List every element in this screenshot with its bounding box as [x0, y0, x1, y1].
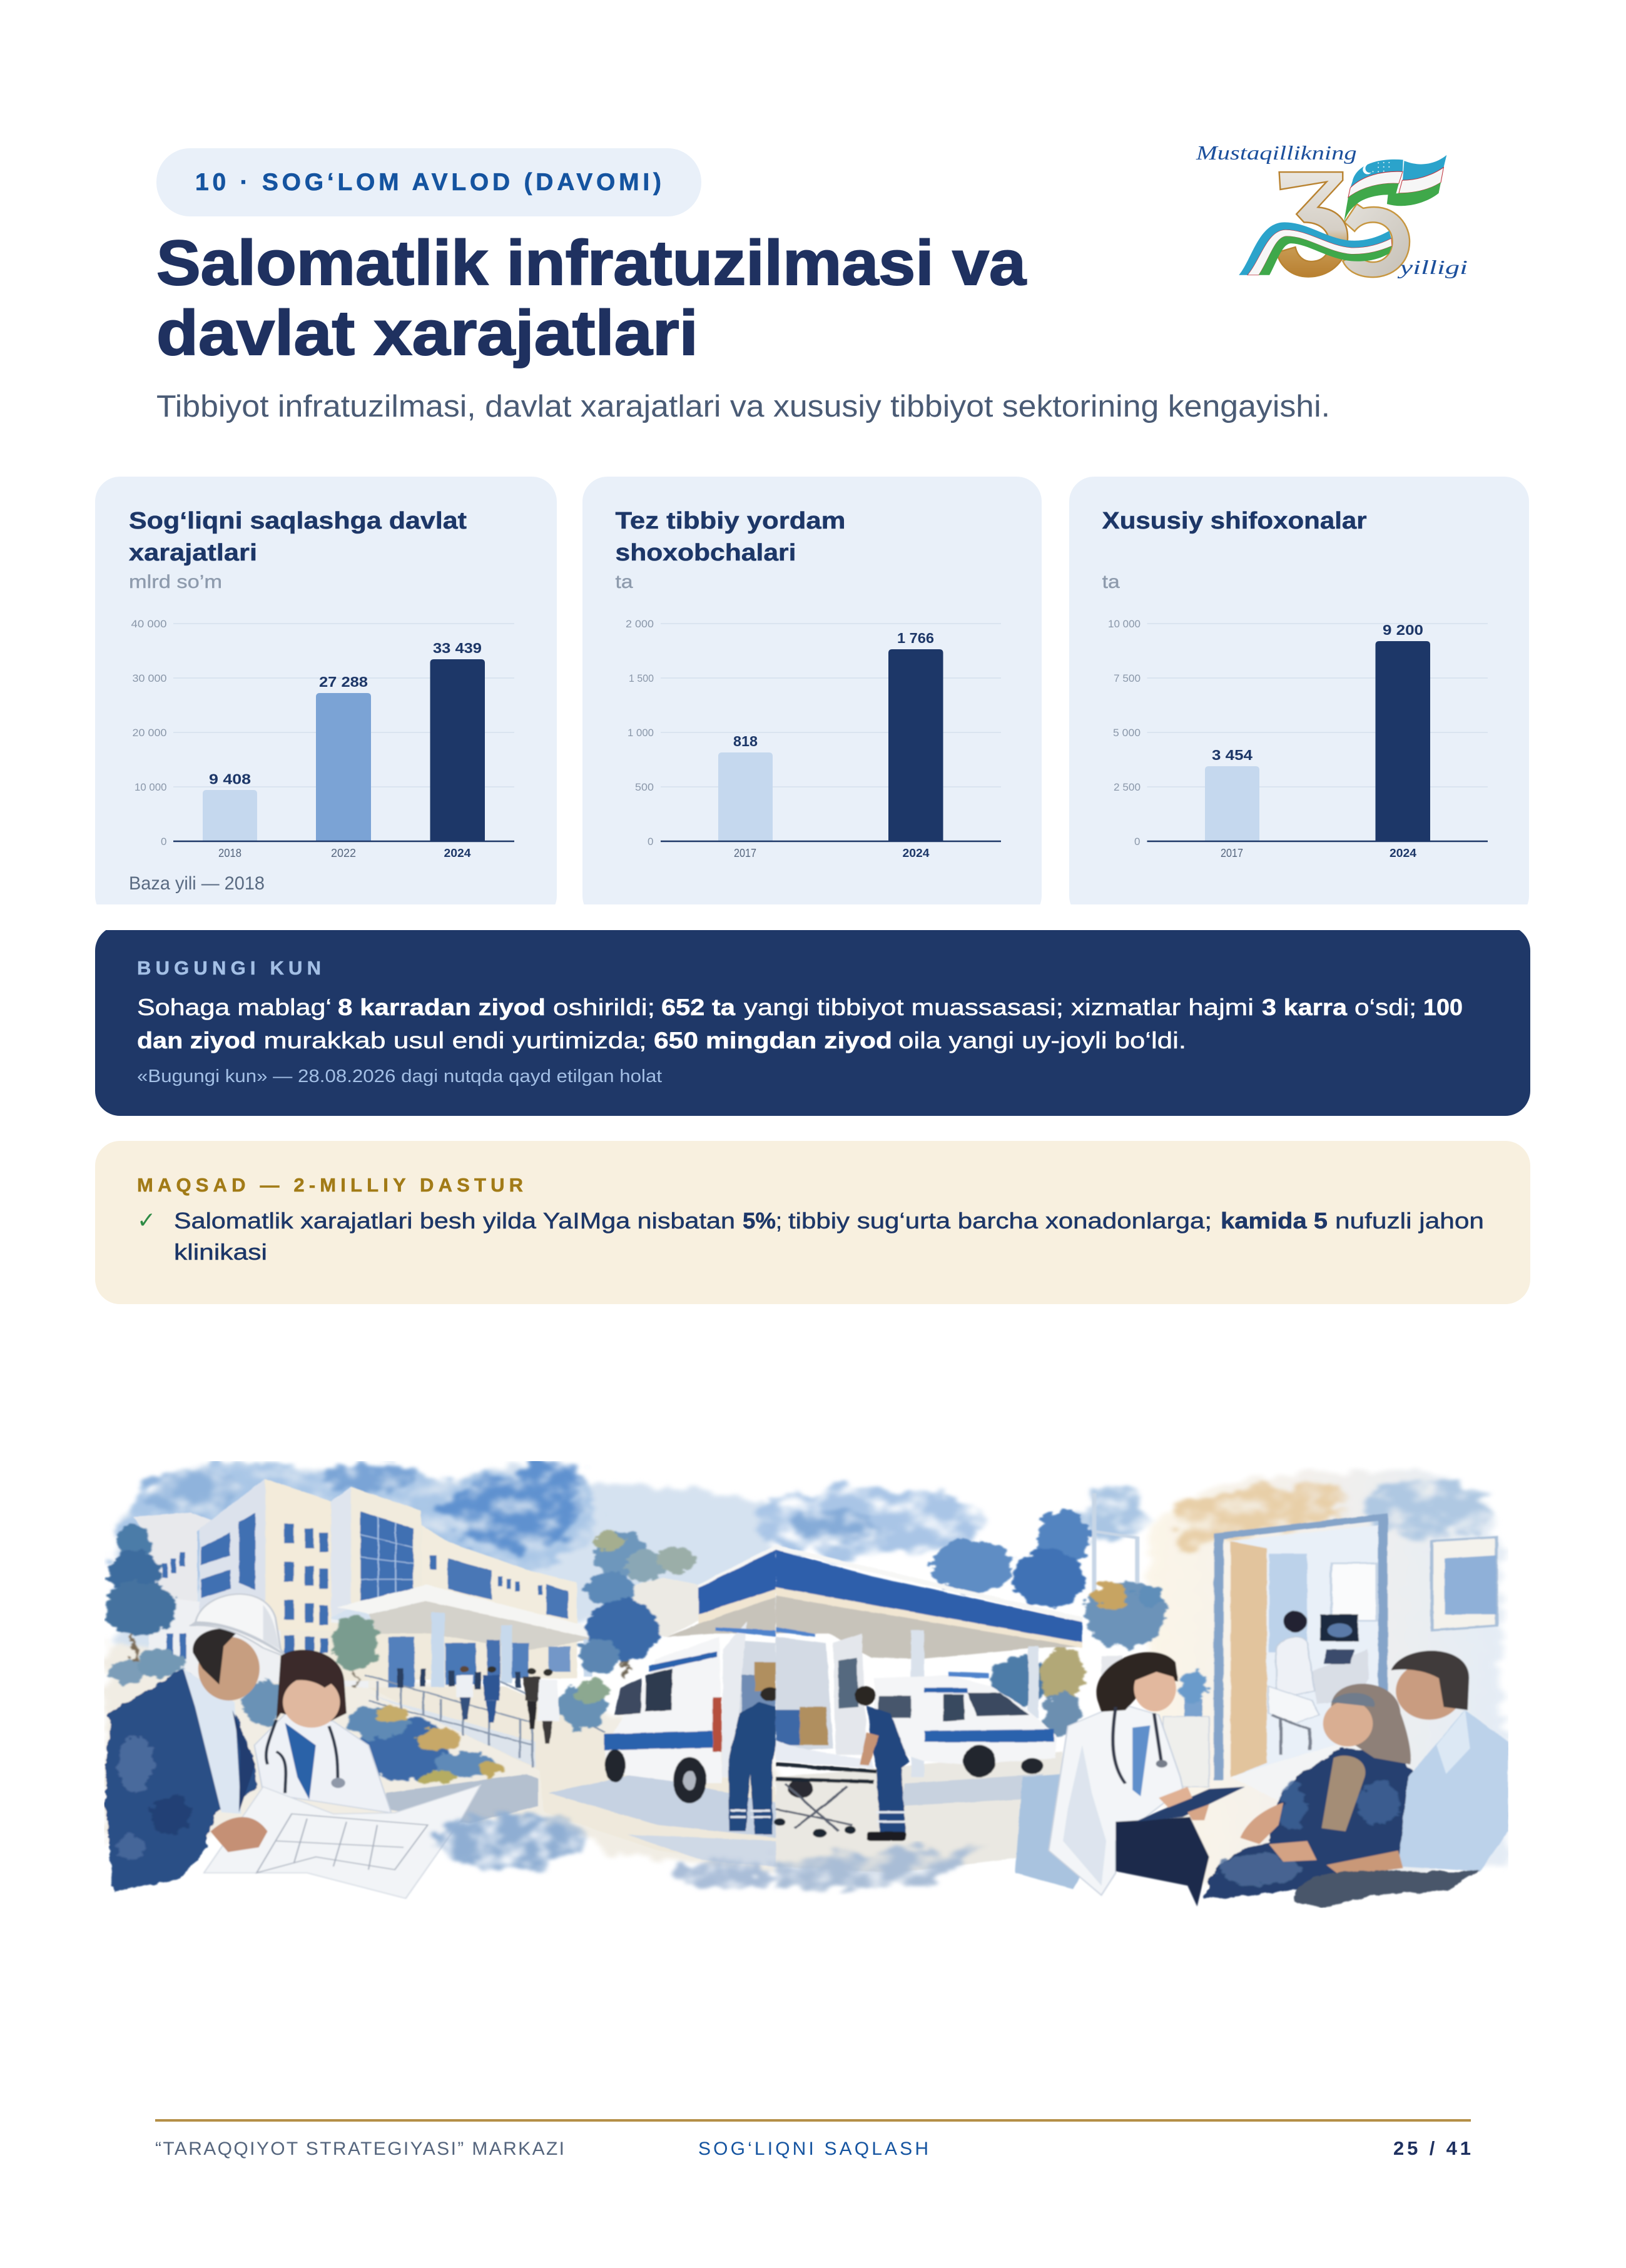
bar chart: 2017: [1221, 847, 1243, 859]
bar chart: 7 500: [1114, 672, 1141, 684]
man in blue shirt: [1293, 1651, 1508, 1908]
callout label: BUGUNGI KUN: [137, 957, 321, 979]
logo digit 5: [1343, 204, 1410, 277]
icon: check mark: ✓: [137, 1208, 156, 1233]
goal text: 5%: [743, 1208, 776, 1233]
card heading: xarajatlari: [129, 540, 257, 566]
unit: ta: [616, 572, 633, 592]
scene right: ambulances and consultation room: [752, 1471, 1508, 1908]
lower wash: [434, 1812, 776, 1889]
callout text: oshirildi;: [553, 995, 655, 1020]
goal text: klinikasi: [174, 1239, 267, 1265]
bar chart: 9 408: [209, 771, 251, 787]
consultation room wall: [1149, 1471, 1503, 1886]
bar chart: 10 000: [1108, 618, 1141, 630]
pavement: [776, 1751, 1063, 1873]
callout text: oila yangi uy-joyli bo‘ldi.: [898, 1028, 1186, 1053]
footer section name: SOG‘LIQNI SAQLASH: [698, 2139, 928, 2159]
bar chart: 3 454: [1212, 747, 1253, 763]
sky and trees: [752, 1487, 1144, 1557]
subtitle: Tibbiyot infratuzilmasi, davlat xarajatlari va xususiy tibbiyot sektorining kengayishi.: [156, 390, 1330, 423]
card heading: Sog‘liqni saqlashga davlat: [129, 508, 467, 534]
wall picture: [1431, 1537, 1496, 1631]
bar chart: [626, 618, 1001, 859]
ambulance bay left part: [632, 1545, 776, 1637]
callout text: 8 karradan ziyod: [338, 995, 546, 1020]
goal text: tibbiy sug‘urta barcha xonadonlarga;: [788, 1208, 1212, 1233]
doctor with clipboard: [1015, 1652, 1245, 1906]
unit: mlrd so’m: [129, 572, 222, 592]
illustration: watercolor healthcare scene: [104, 1461, 1508, 1908]
elderly woman: [1204, 1684, 1418, 1898]
card heading: [129, 508, 467, 566]
callout text: yangi tibbiyot muassasasi; xizmatlar hajmi: [744, 995, 1254, 1020]
card background: [1069, 477, 1529, 921]
card background: [95, 477, 557, 921]
callout: goal: [95, 1141, 1530, 1304]
bar chart: 0: [648, 836, 653, 848]
bar chart: 40 000: [131, 618, 166, 630]
base year note: Baza yili — 2018: [129, 873, 265, 894]
bar chart: 5 000: [1113, 727, 1141, 739]
trees and shrubs: [104, 1525, 696, 1783]
ultrasound machine: [1320, 1614, 1358, 1641]
callout text: Sohaga mablag‘: [137, 995, 332, 1020]
bar chart: 2 500: [1114, 781, 1141, 793]
logo: 35 years of independence: [1196, 142, 1468, 278]
callout text: 100: [1423, 995, 1463, 1020]
bar chart: 2 000: [626, 618, 654, 630]
engineer figure: [105, 1594, 287, 1892]
bar chart: 2024: [902, 847, 930, 859]
bar chart: 1 000: [628, 727, 654, 739]
near ambulance rear and stretcher: [774, 1627, 877, 1838]
title: [156, 228, 1027, 368]
bar chart: 20 000: [133, 727, 166, 739]
title: Salomatlik infratuzilmasi va: [156, 228, 1027, 298]
footer left text: “TARAQQIYOT STRATEGIYASI” MARKAZI: [155, 2139, 564, 2159]
far ambulance: [874, 1672, 1056, 1777]
logo script top: Mustaqillikning: [1196, 142, 1357, 164]
panel: state health expenditure chart: [95, 477, 557, 921]
ambulance near, front part: [604, 1621, 780, 1835]
doctor figure: [255, 1649, 391, 1813]
bar chart: 1 500: [629, 672, 654, 684]
bar chart: 1 766: [897, 630, 934, 646]
callout background: [95, 926, 1530, 1116]
panel: ambulance stations chart: [582, 477, 1042, 921]
goal background: [95, 1141, 1530, 1304]
callout text: 652 ta: [661, 995, 735, 1020]
bar chart: 9 200: [1383, 622, 1423, 638]
unit: ta: [1102, 572, 1120, 592]
bar chart: 33 439: [433, 640, 482, 656]
bar chart: 0: [161, 836, 166, 848]
callout text: 3 karra: [1262, 995, 1347, 1020]
header block: [156, 148, 1330, 423]
bar chart: 27 288: [319, 674, 368, 690]
hospital building: [134, 1479, 597, 1691]
goal text: kamida 5: [1221, 1208, 1328, 1233]
card heading: Tez tibbiy yordam: [616, 508, 846, 534]
goal label: MAQSAD — 2-MILLIY DASTUR: [137, 1174, 523, 1196]
scene left: hospital, engineer and doctor: [104, 1461, 780, 1898]
card background: [582, 477, 1042, 921]
goal text: [174, 1208, 1484, 1265]
title: davlat xarajatlari: [156, 298, 698, 368]
goal text: Salomatlik xarajatlari besh yilda YaIMga nisbatan: [174, 1208, 735, 1233]
callout text: dan ziyod: [137, 1028, 256, 1053]
footer: [155, 2119, 1471, 2159]
bar chart: 2018: [218, 847, 241, 859]
card heading: [616, 508, 846, 566]
callout: today: [95, 926, 1530, 1116]
footer rule: [155, 2119, 1471, 2122]
callout text: 650 mingdan ziyod: [654, 1028, 892, 1053]
doorway and exam room: [1101, 1517, 1496, 1803]
plants and cabinet: [1164, 1716, 1209, 1787]
bar chart: 0: [1134, 836, 1140, 848]
bar chart: 500: [635, 781, 654, 793]
callout text: murakkab usul endi yurtimizda;: [264, 1028, 647, 1053]
page number: 25 / 41: [1393, 2137, 1471, 2159]
bar chart: [1108, 618, 1488, 859]
sky: [118, 1461, 776, 1656]
card heading: Xususiy shifoxonalar: [1102, 508, 1367, 534]
callout footnote: «Bugungi kun» — 28.08.2026 dagi nutqda qayd etilgan holat: [137, 1066, 662, 1086]
goal text: nufuzli jahon: [1335, 1208, 1484, 1233]
callout text: o‘sdi;: [1354, 995, 1416, 1020]
section pill: 10 · SOG‘LOM AVLOD (DAVOMI): [195, 169, 661, 196]
bar chart: 10 000: [135, 781, 166, 793]
bar chart: 2017: [734, 847, 756, 859]
blueprint sheet: [204, 1785, 480, 1898]
goal text: ;: [776, 1208, 782, 1233]
bar chart: 30 000: [133, 672, 166, 684]
bar chart: 2024: [1390, 847, 1416, 859]
logo ribbon: [1239, 222, 1392, 275]
ambulance bay canopy: [776, 1545, 1082, 1777]
bar chart: [131, 618, 514, 859]
window frame: [1094, 1493, 1137, 1637]
pavement and ramp: [365, 1675, 776, 1866]
small walking figures: [397, 1666, 560, 1744]
bar chart: 818: [733, 733, 758, 749]
callout text: [137, 995, 1463, 1053]
logo digit 3: [1277, 172, 1348, 277]
ground wash: [105, 1643, 776, 1873]
card heading: shoxobchalari: [616, 540, 796, 566]
logo flag: [1344, 155, 1446, 222]
bar chart: 2024: [444, 847, 470, 859]
panel: private hospitals chart: [1069, 477, 1529, 921]
logo script bottom: yilligi: [1397, 256, 1468, 278]
section pill: [156, 148, 701, 216]
medic figure: [855, 1686, 909, 1841]
bar chart: 2022: [331, 847, 356, 859]
